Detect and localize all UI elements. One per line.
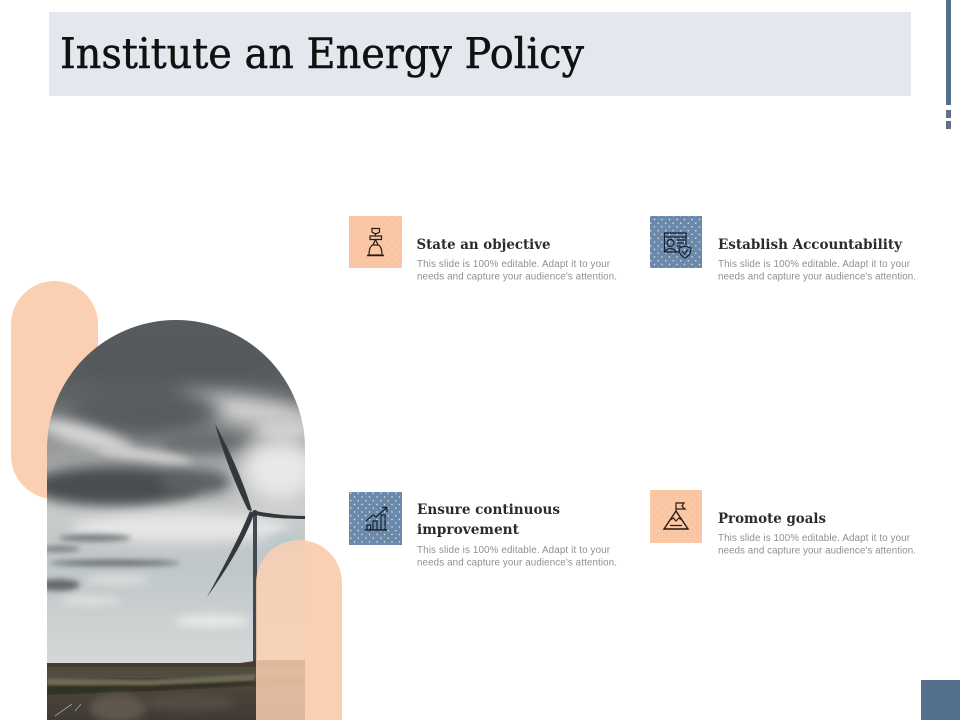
title: Institute an Energy Policy xyxy=(60,29,584,78)
photo: wind turbine in arch xyxy=(47,320,305,720)
heading: Promote goals xyxy=(718,511,826,527)
heading: improvement xyxy=(417,522,520,538)
description xyxy=(417,259,617,282)
description: needs and capture your audience's attention. xyxy=(718,272,916,282)
bottom-right corner square xyxy=(921,680,960,720)
icon: objective tile xyxy=(349,216,402,268)
description xyxy=(417,545,617,568)
description xyxy=(718,533,916,556)
item: Establish Accountability xyxy=(650,216,916,282)
ground xyxy=(47,660,305,720)
icon: accountability tile xyxy=(650,216,702,268)
description: needs and capture your audience's attention. xyxy=(417,558,617,568)
peach pill behind photo xyxy=(11,281,98,499)
title banner xyxy=(49,12,911,96)
description: needs and capture your audience's attention. xyxy=(417,272,617,282)
heading: State an objective xyxy=(416,237,551,253)
item: Ensure continuous improvement xyxy=(349,492,617,568)
icon: improvement tile xyxy=(349,492,402,545)
description: needs and capture your audience's attention. xyxy=(718,546,916,556)
item: State an objective xyxy=(349,216,617,282)
item: Promote goals xyxy=(650,490,916,556)
heading: Establish Accountability xyxy=(718,237,903,253)
heading xyxy=(417,502,560,538)
peach pill overlay on photo xyxy=(256,540,305,720)
turbine xyxy=(207,424,305,663)
peach pill lower right xyxy=(256,540,342,720)
description: This slide is 100% editable. Adapt it to your xyxy=(718,259,911,270)
description: This slide is 100% editable. Adapt it to your xyxy=(417,259,611,270)
clouds xyxy=(30,330,320,628)
heading: Ensure continuous xyxy=(417,502,560,518)
description: This slide is 100% editable. Adapt it to your xyxy=(718,533,911,544)
top-right accent bar xyxy=(946,0,951,129)
description: This slide is 100% editable. Adapt it to your xyxy=(417,545,611,556)
description xyxy=(718,259,916,282)
icon: goals tile xyxy=(650,490,702,543)
